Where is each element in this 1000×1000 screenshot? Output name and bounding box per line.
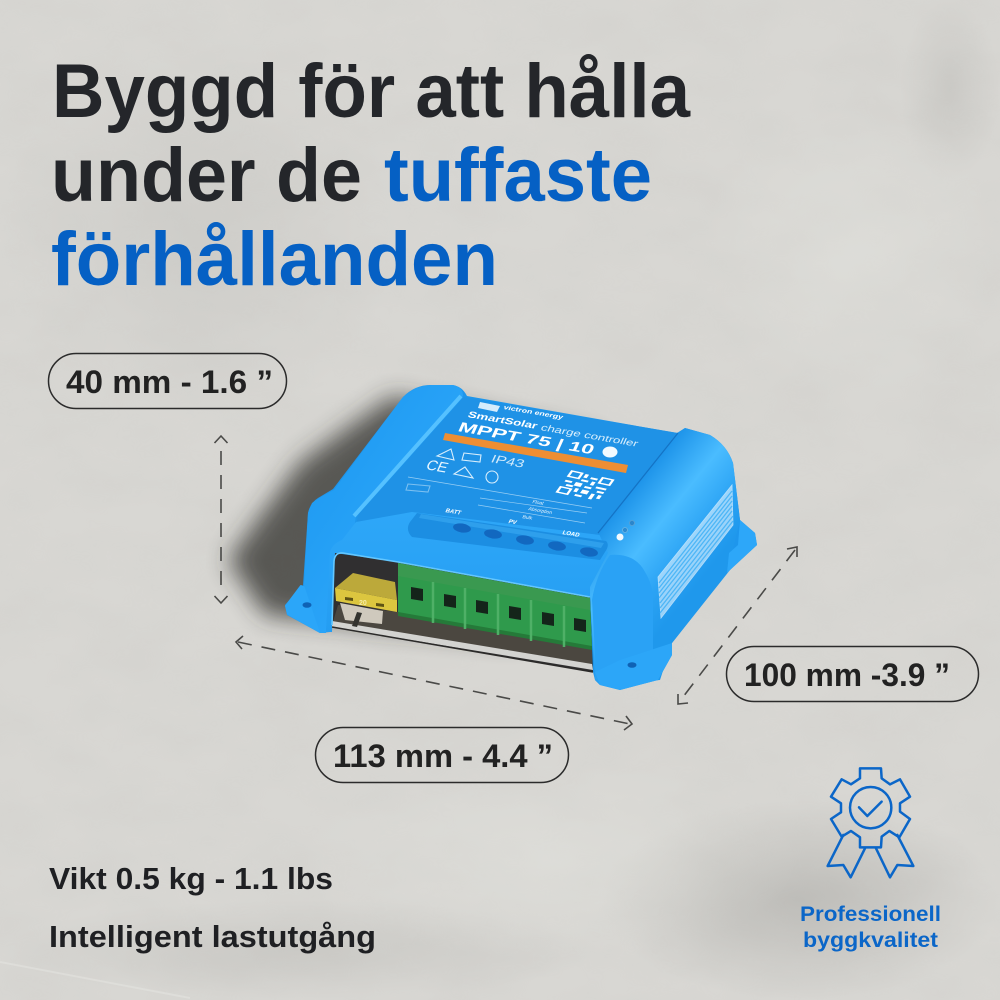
green terminal block — [398, 563, 592, 650]
dark base line — [332, 627, 593, 672]
arrow: width — [236, 636, 632, 730]
device label print: IP43 — [489, 452, 527, 470]
badge caption: byggkvalitet — [803, 929, 938, 952]
opening rim — [332, 553, 590, 625]
compliance icons — [406, 449, 592, 523]
badge caption — [800, 903, 941, 952]
terminal separators — [433, 582, 564, 647]
title: tuffaste — [384, 133, 652, 218]
product: solar charge controller — [285, 385, 757, 690]
floor crease — [0, 962, 190, 998]
device shadow — [228, 396, 600, 640]
yellow fuse — [335, 573, 397, 612]
device label print: victron energy — [502, 404, 565, 421]
arrow: height — [214, 436, 228, 603]
silver base strip — [332, 621, 593, 670]
orange bar — [443, 433, 628, 473]
front opening interior — [332, 553, 593, 672]
corner arch — [592, 555, 653, 672]
tiny terminal labels: BATT — [444, 508, 462, 517]
housing silhouette — [285, 385, 757, 690]
device label print: Absorption — [527, 506, 553, 516]
spec: smart load output: Intelligent lastutgång — [49, 919, 376, 954]
bottom right foot — [595, 643, 672, 690]
status leds — [616, 520, 634, 540]
pill: width dimension — [316, 728, 568, 782]
front upper lip — [326, 512, 612, 632]
device label print: Float — [531, 499, 545, 507]
side spec label — [658, 485, 733, 618]
device label print: CE — [423, 458, 450, 476]
left foot — [286, 586, 325, 632]
mounting holes — [302, 602, 636, 668]
right foot — [727, 520, 757, 573]
terminal holes — [411, 587, 586, 632]
device label print: Bulk — [521, 514, 534, 522]
device label print — [406, 402, 640, 539]
pill: height dimension: 40 mm - 1.6 ” — [66, 364, 273, 400]
device label print: LOAD — [561, 530, 581, 539]
rail highlight — [354, 396, 461, 516]
title: under de — [51, 133, 362, 218]
connector strip — [408, 513, 608, 560]
top label plate — [356, 397, 678, 535]
arrow: depth — [678, 547, 797, 704]
device label print: PV — [507, 519, 518, 526]
device label print: charge controller — [539, 422, 640, 448]
yellow fuse: 20 — [359, 600, 367, 607]
plate edge line — [598, 433, 678, 533]
title: förhållanden — [51, 217, 498, 302]
device label print: SmartSolar — [466, 409, 540, 431]
left rail — [304, 385, 463, 633]
pill: width dimension: 113 mm - 4.4 ” — [333, 738, 553, 774]
brand logo — [478, 402, 500, 412]
badge caption: Professionell — [800, 903, 941, 926]
spec: weight: Vikt 0.5 kg - 1.1 lbs — [49, 861, 333, 896]
screw holes — [452, 522, 599, 558]
white fuse holder — [340, 603, 383, 624]
title: Byggd för att hålla — [52, 49, 691, 134]
device label print: MPPT 75 | 10 — [455, 420, 597, 458]
pill: depth dimension — [726, 646, 978, 702]
pill: height dimension — [48, 354, 286, 408]
pill: depth dimension: 100 mm -3.9 ” — [744, 657, 950, 693]
icon: quality badge — [828, 768, 913, 877]
title — [51, 49, 691, 302]
right side body — [590, 428, 740, 685]
qr code — [557, 471, 613, 501]
